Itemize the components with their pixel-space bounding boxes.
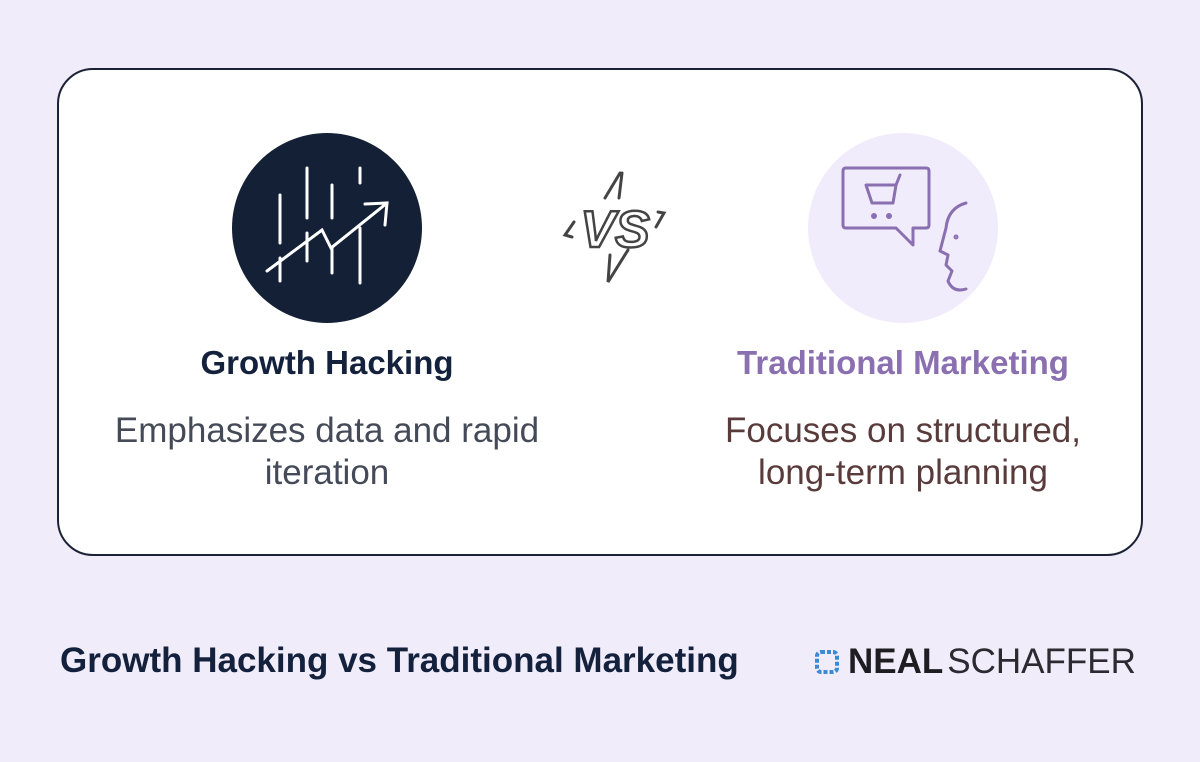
text: traditional marketing description: long-term planning [758,453,1048,492]
logo: Neal Schaffer: NEAL [848,642,943,681]
heading: Growth Hacking: Growth Hacking [200,344,454,381]
text: traditional marketing description [725,411,1081,492]
heading: Traditional Marketing: Traditional Marketing [737,344,1069,381]
footer title: Growth Hacking vs Traditional Marketing [60,641,739,680]
icon: VS [562,171,666,283]
icon: logo mark [815,650,839,674]
panel: comparison card [57,68,1143,556]
text: growth hacking description: iteration [265,453,389,492]
icon: VS: VS [580,201,650,259]
icon: traditional marketing circle [808,133,998,323]
icon: growth chart circle [232,133,422,323]
text: growth hacking description [115,411,539,492]
text: traditional marketing description: Focuses on structured, [725,411,1081,450]
text: growth hacking description: Emphasizes data and rapid [115,411,539,450]
logo: Neal Schaffer: SCHAFFER [947,642,1136,681]
logo: Neal Schaffer [815,642,1136,681]
